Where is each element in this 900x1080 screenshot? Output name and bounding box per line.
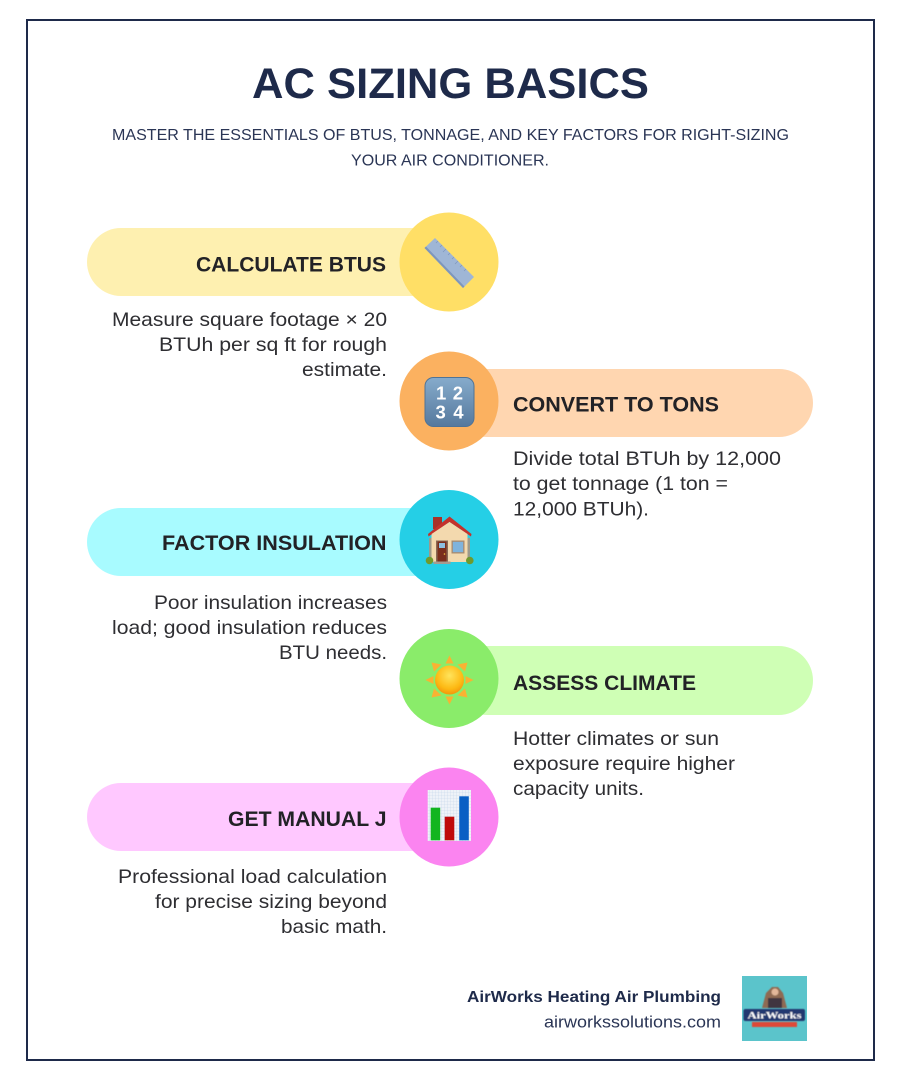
- subtitle: YOUR AIR CONDITIONER.: [351, 152, 549, 170]
- heading: CONVERT TO TONS: [513, 394, 719, 416]
- description: Divide total BTUh by 12,000: [513, 448, 781, 470]
- description: exposure require higher: [513, 753, 735, 775]
- description: basic math.: [281, 916, 387, 938]
- icon: number keycap: 1 2: [436, 382, 463, 403]
- heading: FACTOR INSULATION: [162, 532, 386, 555]
- icon: sun: [426, 656, 474, 704]
- icon: number keycap: 3 4: [436, 401, 464, 422]
- description: Professional load calculation: [118, 866, 387, 888]
- heading pill: [453, 369, 813, 437]
- description: Measure square footage × 20: [112, 309, 387, 331]
- subtitle: MASTER THE ESSENTIALS OF BTUS, TONNAGE, AND KEY FACTORS FOR RIGHT-SIZING: [112, 127, 789, 144]
- panel: convert to tons: [400, 352, 813, 520]
- logo: [742, 976, 807, 1041]
- icon: number keycap: [424, 377, 474, 427]
- heading pill: [87, 783, 447, 851]
- panel: get manual J: [87, 768, 498, 938]
- icon: house: [426, 516, 474, 564]
- description: for precise sizing beyond: [155, 891, 387, 913]
- description: Poor insulation increases: [154, 592, 387, 614]
- footer: company name and website: airworkssolutions.com: [544, 1014, 721, 1032]
- icon: ruler: [424, 238, 474, 288]
- footer: company name and website: AirWorks Heating Air Plumbing: [467, 989, 721, 1006]
- heading pill: [87, 228, 447, 296]
- panel: factor insulation: [87, 490, 498, 664]
- icon circle: [400, 629, 498, 728]
- heading: GET MANUAL J: [228, 808, 386, 831]
- icon circle: [400, 352, 498, 450]
- heading pill: [453, 646, 813, 715]
- description: BTUh per sq ft for rough: [159, 334, 387, 356]
- description: [112, 592, 387, 664]
- description: [513, 728, 735, 800]
- description: capacity units.: [513, 778, 644, 800]
- icon circle: [400, 490, 498, 589]
- description: to get tonnage (1 ton =: [513, 473, 728, 495]
- logo: AirWorks: [748, 1012, 802, 1022]
- description: load; good insulation reduces: [112, 617, 387, 639]
- heading pill: [87, 508, 447, 576]
- description: Hotter climates or sun: [513, 728, 719, 750]
- description: estimate.: [302, 359, 387, 381]
- panel: calculate BTUs: [87, 212, 498, 381]
- title: AC SIZING BASICS: [252, 60, 649, 108]
- heading: ASSESS CLIMATE: [513, 672, 696, 695]
- icon circle: [400, 768, 498, 866]
- description: 12,000 BTUh).: [513, 498, 649, 520]
- description: [112, 309, 387, 381]
- description: [513, 448, 781, 520]
- icon: bar chart: [428, 790, 471, 841]
- heading: CALCULATE BTUS: [196, 254, 386, 276]
- icon circle: [400, 212, 498, 312]
- description: BTU needs.: [279, 642, 387, 664]
- description: [118, 866, 387, 938]
- footer: company name and website: [467, 989, 721, 1032]
- subtitle: [112, 127, 789, 170]
- panel: assess climate: [400, 629, 813, 800]
